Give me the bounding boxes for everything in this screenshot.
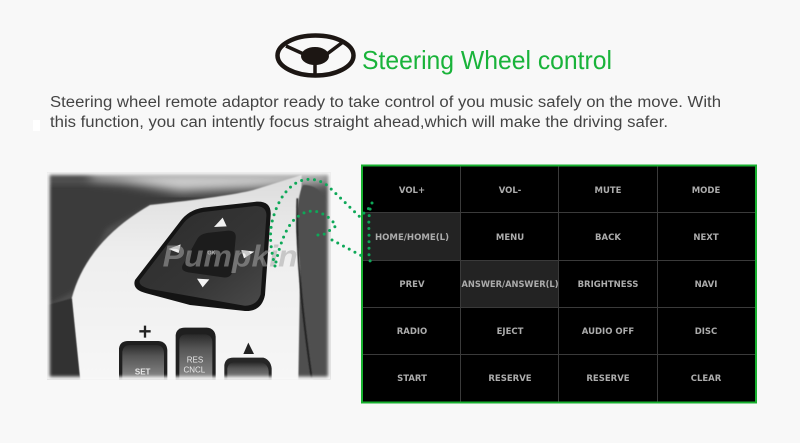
button labels: NEXT — [693, 233, 719, 243]
button labels: BACK — [595, 233, 621, 243]
button labels: NAVI — [695, 280, 717, 290]
highlighted cell: HOME/HOME(L) — [363, 213, 460, 260]
button labels: MUTE — [595, 186, 622, 196]
plus symbol — [139, 326, 151, 338]
button labels: VOL+ — [399, 186, 425, 196]
watermark: Pumpkin — [163, 239, 298, 273]
button: RES CNCL — [176, 328, 216, 382]
small white mark — [33, 120, 40, 131]
control pad — [134, 202, 271, 311]
button: SET — [119, 341, 167, 382]
panel: button grid — [362, 166, 756, 402]
button labels: START — [397, 374, 427, 384]
button labels: BRIGHTNESS — [578, 280, 638, 290]
button labels: MENU — [496, 233, 524, 243]
button labels: CLEAR — [691, 374, 722, 384]
highlighted cell: ANSWER/ANSWER(L) — [461, 260, 558, 307]
button labels: ANSWER/ANSWER(L) — [462, 280, 559, 290]
button labels: RESERVE — [488, 374, 532, 384]
icon: steering wheel — [278, 36, 354, 76]
button labels: MODE — [692, 186, 720, 196]
button: RES CNCL: CNCL — [183, 365, 206, 374]
button labels — [375, 186, 722, 384]
button labels: EJECT — [497, 327, 524, 337]
button labels: RADIO — [397, 327, 427, 337]
button: RES CNCL: RES — [187, 355, 203, 364]
button labels: RESERVE — [586, 374, 630, 384]
arrows: dotted green connector lines — [271, 179, 372, 266]
button: SET: SET — [135, 367, 151, 376]
title: Steering Wheel control — [362, 45, 612, 75]
button: up — [224, 343, 272, 382]
button labels: PREV — [399, 280, 425, 290]
description text: Steering wheel remote adaptor ready to take control of you music safely on the move. With — [50, 94, 721, 111]
photo edge fade — [47, 172, 331, 379]
control pad: OK — [207, 250, 215, 256]
description text — [50, 94, 721, 131]
button labels: HOME/HOME(L) — [375, 233, 449, 243]
button labels: AUDIO OFF — [582, 327, 634, 337]
photo: steering wheel controls — [47, 172, 331, 382]
description text: this function, you can intently focus straight ahead,which will make the driving safer. — [50, 114, 668, 131]
button labels: DISC — [695, 327, 717, 337]
button labels: VOL- — [499, 186, 522, 196]
